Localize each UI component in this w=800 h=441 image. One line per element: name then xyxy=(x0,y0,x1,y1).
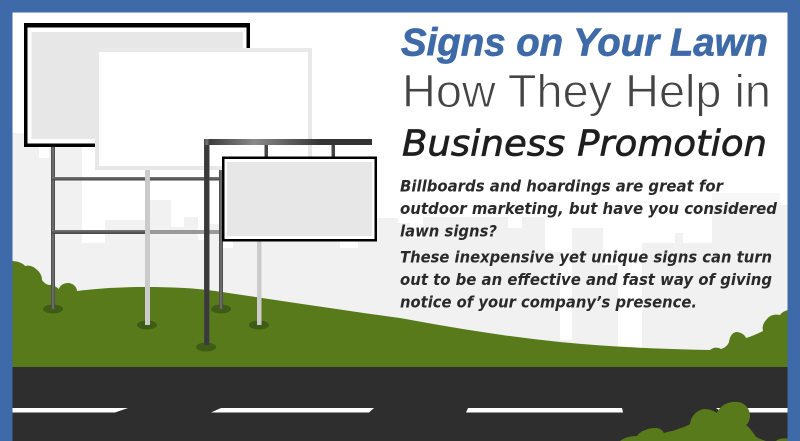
intro paragraph 2 xyxy=(400,248,772,312)
intro paragraph 1: Billboards and hoardings are great for xyxy=(400,176,724,196)
title line 3: Business Promotion xyxy=(402,124,767,164)
billboard 1 poles and crossbars xyxy=(51,147,223,310)
intro paragraph 1: outdoor marketing, but have you considered xyxy=(400,199,778,218)
hanging sign frame xyxy=(204,139,372,345)
road lane markings xyxy=(12,408,788,412)
billboard 2 poles xyxy=(145,170,262,326)
billboard 1 rear black frame xyxy=(24,23,250,147)
pole base shadows xyxy=(43,304,269,352)
intro paragraph 2: out to be an effective and fast way of giving xyxy=(400,270,772,289)
foreground bush xyxy=(620,402,788,441)
title line 1: Signs on Your Lawn xyxy=(401,22,768,64)
hill with bushes xyxy=(12,261,788,368)
title line 2: How They Help in xyxy=(402,65,771,117)
pole feet over shadows xyxy=(51,300,262,325)
intro paragraph 1: lawn signs? xyxy=(400,222,497,240)
intro paragraph 2: notice of your company’s presence. xyxy=(400,292,697,312)
intro paragraph 1 xyxy=(400,176,778,240)
hanging sign board xyxy=(222,156,377,242)
city skyline xyxy=(12,133,788,370)
intro paragraph 2: These inexpensive yet unique signs can turn xyxy=(400,248,772,266)
road xyxy=(12,367,788,441)
billboard 2 white sign xyxy=(95,48,312,170)
